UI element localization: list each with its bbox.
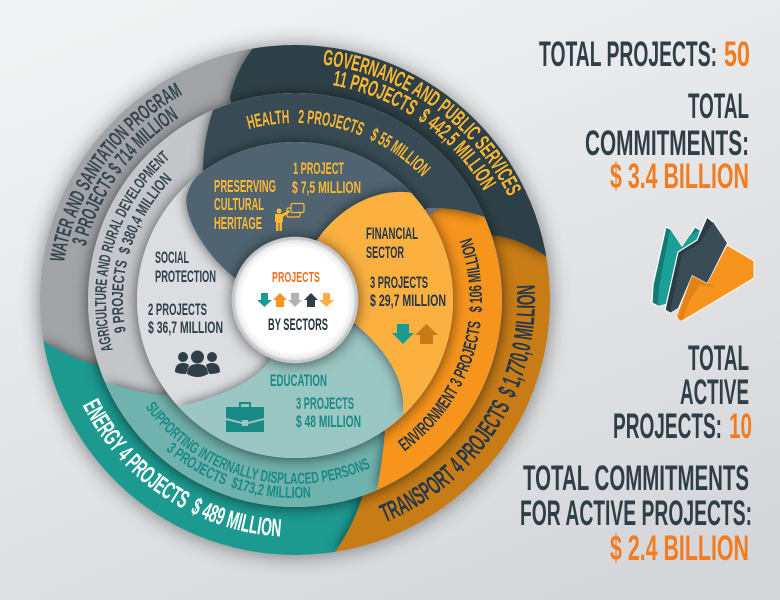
segment: preserving cultural heritage: HERITAGE (214, 213, 262, 233)
segment: financial sector (295, 192, 454, 415)
icon: people (175, 350, 220, 377)
segment: education: EDUCATION (270, 371, 327, 390)
segment: education: $ 48 MILLION (296, 412, 361, 431)
segment: water and sanitation program: 3 PROJECTS $ 714 MILLION (72, 106, 178, 246)
icon: five coloured arrows (257, 293, 334, 307)
segment: health: HEALTH 2 PROJECTS $ 55 MILLION (246, 110, 432, 176)
segment: preserving cultural heritage: $ 7,5 MILLION (292, 178, 361, 197)
segment: preserving cultural heritage: PRESERVING (214, 176, 276, 196)
centre disc: projects by sectors: PROJECTS (272, 269, 320, 286)
centre disc: projects by sectors: BY SECTORS (268, 315, 328, 334)
icon: logo (652, 217, 754, 321)
segment: preserving cultural heritage (186, 141, 420, 300)
statistic: total commitments for active projects (520, 459, 752, 568)
segment: water and sanitation program: WATER AND SANITATION PROGRAM (50, 82, 182, 260)
segment: governance and public services (223, 45, 546, 262)
icon: down and up arrows (392, 324, 438, 344)
segment: preserving cultural heritage: 1 PROJECT (293, 159, 344, 178)
segment: preserving cultural heritage: CULTURAL (214, 194, 264, 214)
segment: transport: TRANSPORT 4 PROJECTS $ 1,770,0 MILLION (378, 286, 536, 522)
segment: education (175, 323, 439, 458)
segment: agriculture and rural development: 9 PROJECTS $ 380,4 MILLION (112, 172, 172, 333)
segment: energy: ENERGY 4 PROJECTS $ 489 MILLION (82, 398, 282, 536)
circular sector diagram (27, 32, 563, 569)
segment: water and sanitation program (27, 32, 563, 569)
segment: financial sector: SECTOR (366, 243, 404, 262)
centre disc: projects by sectors (233, 238, 357, 362)
statistic: total commitments (585, 87, 749, 196)
statistic: total projects: 50 (724, 35, 750, 74)
segment: governance and public services: GOVERNANCE AND PUBLIC SERVICES (324, 50, 521, 196)
segment: environment (371, 190, 502, 491)
segment: health (194, 93, 486, 223)
segment: supporting internally displaced persons (104, 376, 422, 507)
segment: supporting internally displaced persons: SUPPORTING INTERNALLY DISPLACED PERSONS (146, 402, 370, 484)
statistic: total active projects (613, 339, 752, 446)
icon: presenter (275, 204, 304, 231)
segment: financial sector: 3 PROJECTS (370, 273, 428, 292)
segment: social protection: PROTECTION (155, 267, 216, 286)
segment: social protection: 2 PROJECTS (148, 300, 207, 319)
segment: social protection: $ 36,7 MILLION (148, 318, 223, 337)
segment: environment: ENVIRONMENT 3 PROJECTS $ 106 MILLION (398, 238, 484, 452)
segment: financial sector: FINANCIAL (366, 224, 418, 243)
segment: social protection: SOCIAL (155, 248, 189, 267)
segment: social protection (137, 142, 453, 458)
segment: agriculture and rural development (79, 88, 512, 516)
segment: agriculture and rural development: AGRICULTURE AND RURAL DEVELOPMENT (95, 150, 168, 350)
segment: energy (43, 337, 399, 555)
segment: governance and public services: 11 PROJECTS $ 442,5 MILLION (333, 70, 496, 190)
segment: financial sector: $ 29,7 MILLION (370, 291, 446, 310)
segment: education: 3 PROJECTS (296, 394, 354, 413)
statistic: total active projects: 10 (729, 407, 752, 446)
segment: transport (332, 200, 550, 552)
segment: supporting internally displaced persons: 3 PROJECTS $173,2 MILLION (167, 442, 310, 498)
icon: briefcase (226, 402, 264, 432)
